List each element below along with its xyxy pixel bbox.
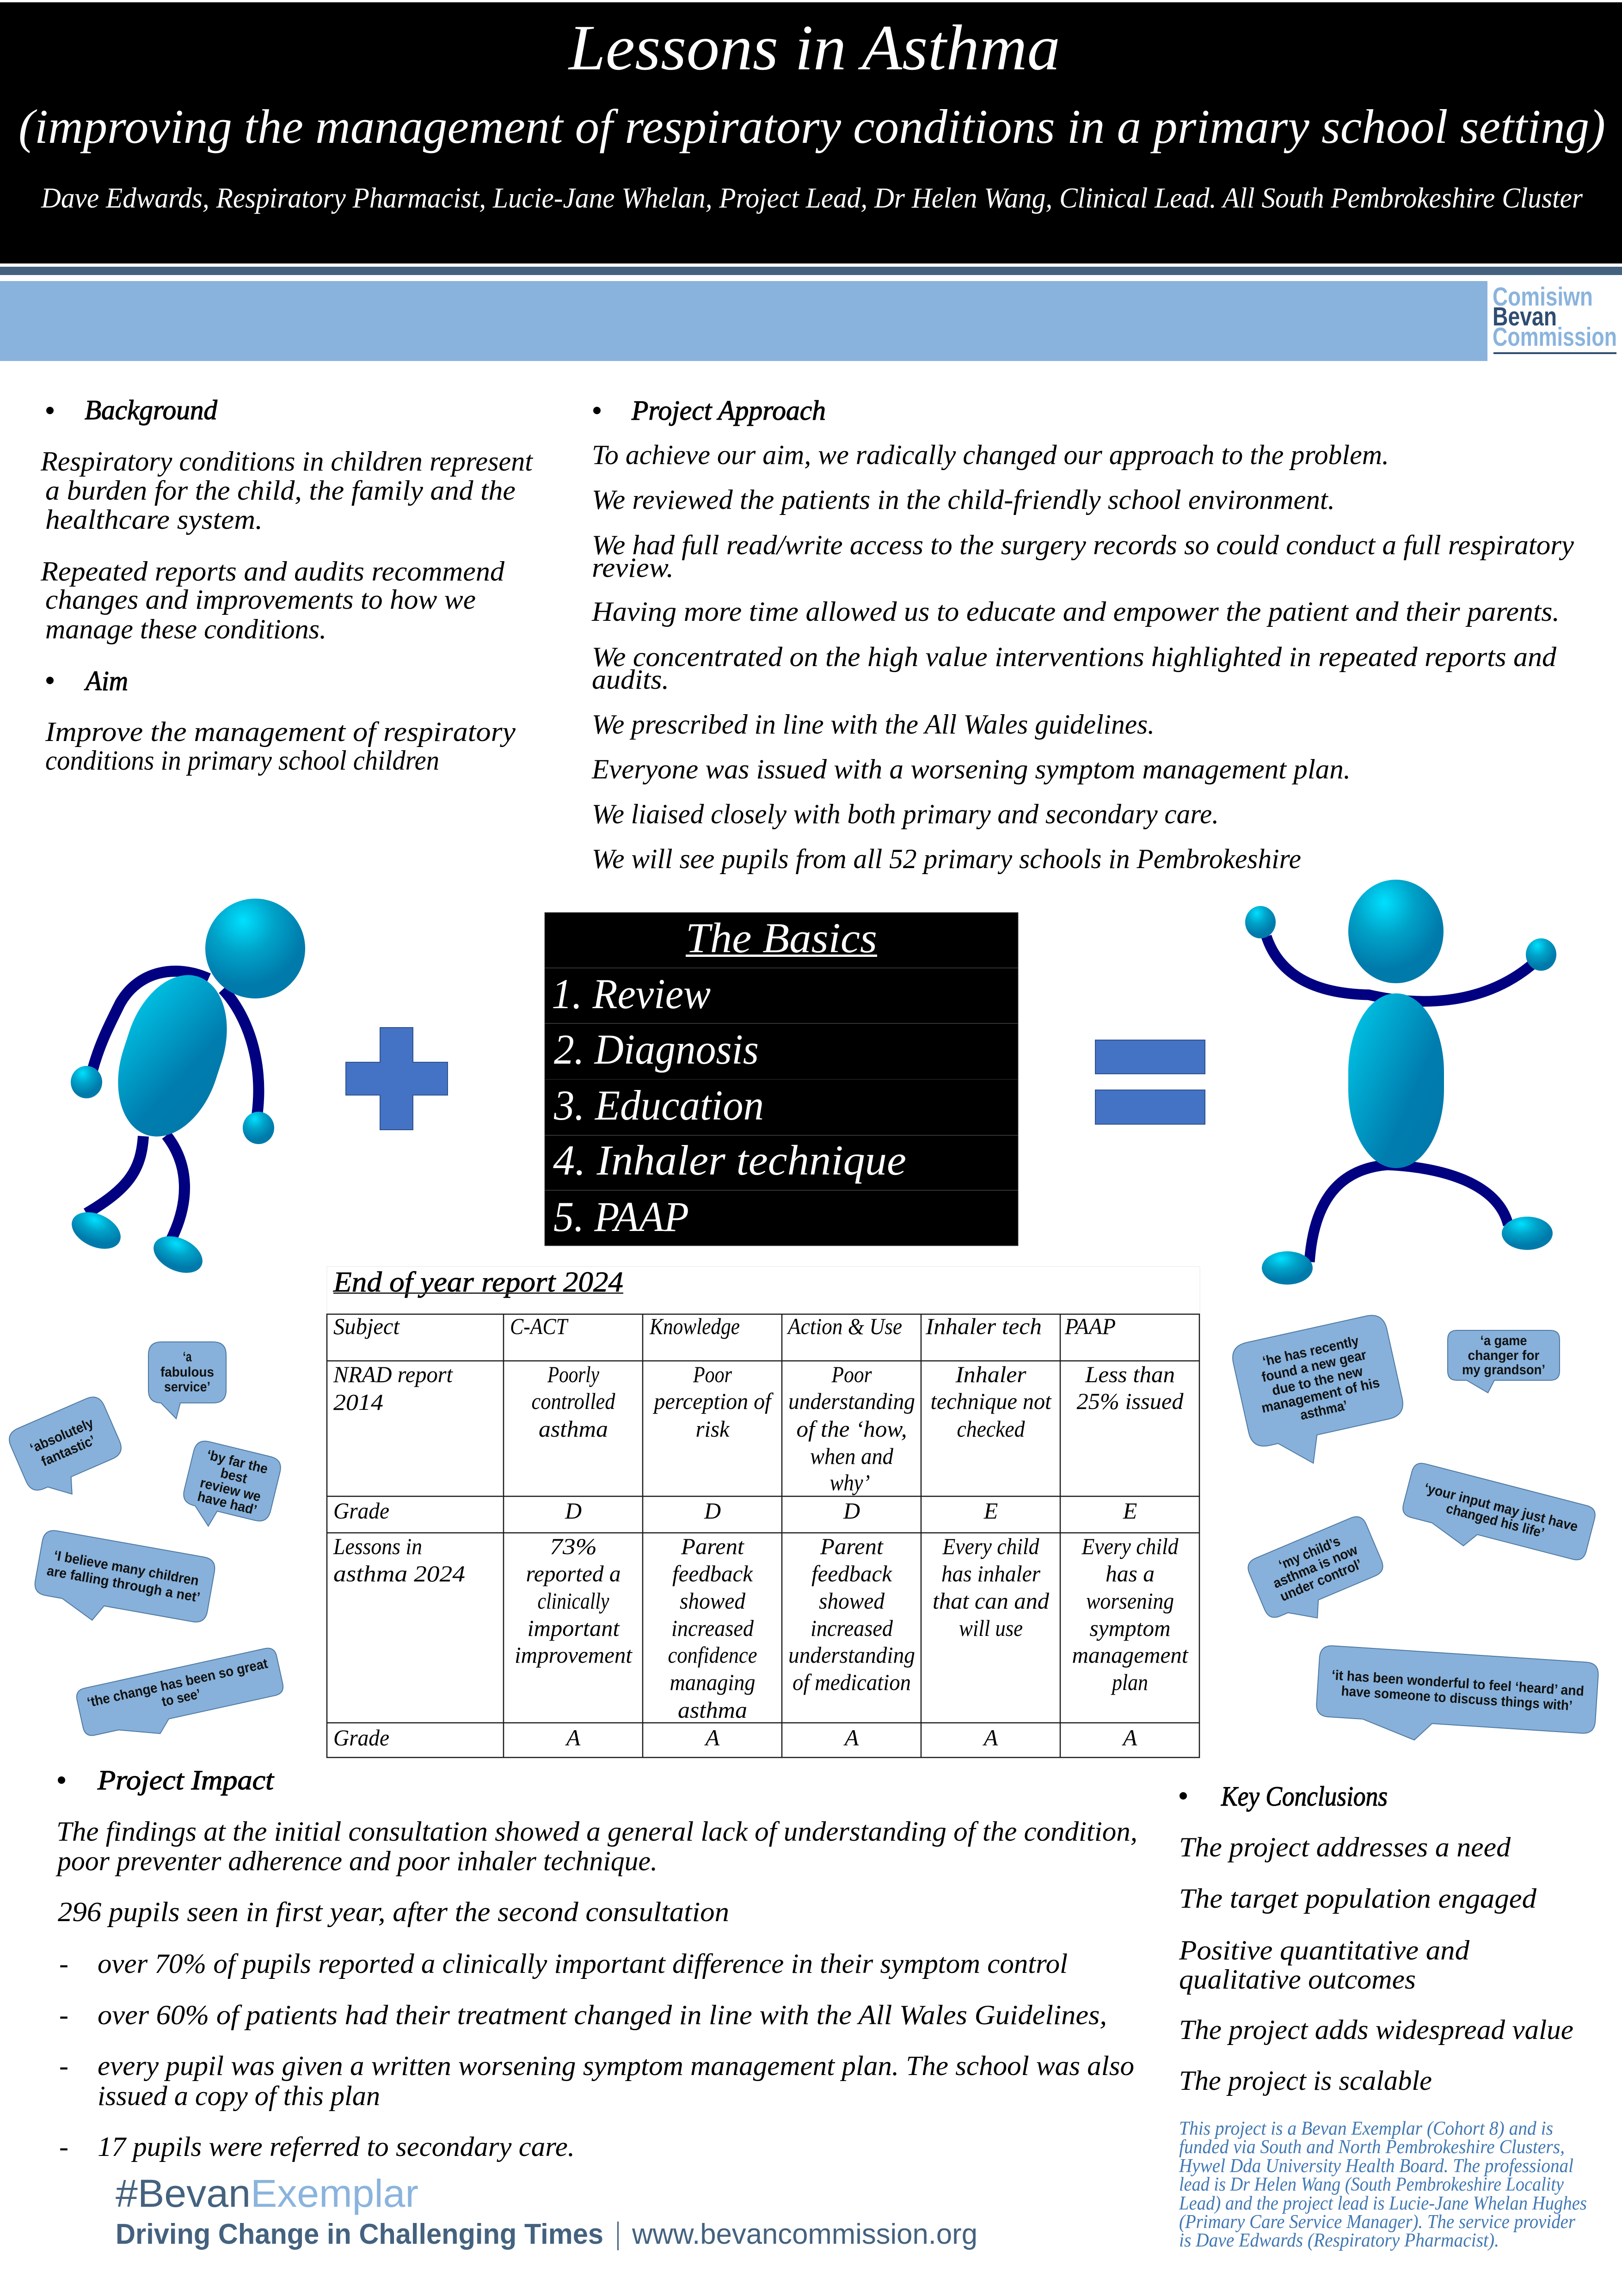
table row: NRAD report 2014: when and [810,1443,894,1469]
list: basics items: 1. Review [552,970,711,1017]
text: background: Repeated reports and audits recommend [40,556,505,587]
table row: NRAD report 2014 [333,1361,1184,1495]
callout: by far the best review [177,1439,283,1540]
footer: hashtag and tagline: Exemplar [251,2172,418,2215]
table row: lessons in asthma 2024: showed [819,1588,885,1614]
text: project impact: The findings at the initial consultation showed a general lack of understanding of the condition, [56,1816,1137,1847]
table row: lessons in asthma 2024: Parent [681,1533,744,1559]
icon: plus sign [346,1028,448,1130]
table header row [333,1313,1116,1339]
table row: lessons in asthma 2024: symptom [1089,1615,1171,1641]
panel: background and aim [40,395,533,776]
table row: grade 2024: A [1122,1725,1137,1751]
text: project approach: We will see pupils from all 52 primary schools in Pembrokeshire [592,844,1301,874]
list: basics items [552,970,906,1240]
table row: lessons in asthma 2024: managing [670,1669,756,1695]
table row: grade 2014: D [565,1498,582,1524]
callout: by far the best review: best [219,1465,249,1487]
table row: NRAD report 2014: Poor [693,1361,732,1387]
table row: NRAD report 2014: risk [695,1416,730,1442]
callout: by far the best review: review we [198,1475,262,1505]
list: basics items: 3. Education [553,1082,764,1129]
text: aim: Improve the management of respiratory [45,716,516,747]
table header row: Inhaler tech [925,1313,1042,1339]
panel: key conclusions [1179,1781,1573,2096]
callout: falling through a net: ‘I believe many children [53,1548,200,1589]
table row: lessons in asthma 2024: feedback [672,1561,753,1586]
callout: feel heard: have someone to discuss things with’ [1341,1684,1573,1714]
callout: new gear: asthma’ [1299,1398,1349,1423]
table row: lessons in asthma 2024: increased [811,1615,893,1641]
icon: equals sign [1095,1040,1205,1124]
callout: under control: asthma is now [1271,1542,1360,1592]
callout: a fabulous service: service’ [164,1379,210,1395]
table row: NRAD report 2014: Poorly [547,1361,600,1387]
table row: grade 2024: Grade [333,1725,389,1751]
table row: lessons in asthma 2024: will use [959,1615,1023,1641]
table row: grade 2024 [333,1725,1137,1751]
callout: falling through a net: are falling through a net’ [46,1563,201,1605]
text: exemplar note: Lead) and the project lead is Lucie-Jane Whelan Hughes [1179,2193,1587,2214]
callout: the change: ‘the change has been so great [86,1656,269,1710]
callout: the change: to see’ [160,1686,202,1709]
logo: Bevan Commission: Comisiwn [1493,282,1593,312]
heading: project approach: Project Approach [631,395,826,426]
text: background: healthcare system. [45,504,263,535]
panel: the basics [545,912,1018,1246]
table row: NRAD report 2014: understanding [788,1388,915,1414]
icon: slumped stick figure [66,899,305,1280]
callout: game changer: my grandson’ [1462,1362,1545,1378]
table row: lessons in asthma 2024: reported a [526,1561,621,1586]
table row: lessons in asthma 2024: Lessons in [333,1533,422,1559]
table row: grade 2014: D [843,1498,860,1524]
callout: absolutely fantastic: fantastic’ [39,1433,98,1469]
table row: lessons in asthma 2024: understanding [788,1642,915,1668]
table row: NRAD report 2014: of the ‘how, [796,1416,907,1442]
table row: NRAD report 2014: 2014 [333,1389,383,1415]
table header row: C-ACT [510,1313,569,1339]
text: project impact: issued a copy of this plan [98,2081,380,2111]
text: project approach [591,440,1574,874]
text: background: a burden for the child, the family and the [45,475,516,506]
text: exemplar note [1179,2118,1587,2251]
table row: lessons in asthma 2024: that can and [933,1588,1050,1614]
table row: lessons in asthma 2024: asthma [678,1697,747,1723]
callout: changed his life [1397,1461,1597,1576]
table row: lessons in asthma 2024: Every child [1081,1533,1179,1559]
callout: under control: ‘my child’s [1277,1533,1343,1573]
text: project approach: Having more time allowed us to educate and empower the patient and their parents. [591,596,1560,627]
table row: lessons in asthma 2024 [333,1533,1189,1723]
table row: lessons in asthma 2024: plan [1111,1669,1148,1695]
callout: new gear [1229,1312,1412,1476]
table row: lessons in asthma 2024: has inhaler [941,1561,1040,1586]
footer: hashtag and tagline: Driving Change in Challenging Times [116,2218,603,2250]
table row: grade 2014: Grade [333,1498,389,1524]
text: key conclusions: Positive quantitative and [1179,1935,1470,1965]
list: basics items: 5. PAAP [553,1193,689,1240]
text: project impact: 17 pupils were referred to secondary care. [98,2131,575,2162]
table row: NRAD report 2014: technique not [930,1388,1052,1414]
list: basics items: 2. Diagnosis [554,1026,759,1073]
table row: grade 2014: E [983,1498,998,1524]
text: project approach: We had full read/write access to the surgery records so could conduct a full respiratory [592,530,1574,560]
text: key conclusions: The target population engaged [1179,1883,1537,1914]
callout: a fabulous service: fabulous [160,1365,214,1380]
header banner [0,2,1622,263]
text: project impact: over 60% of patients had their treatment changed in line with the All Wales Guidelines, [98,2000,1107,2030]
table row: lessons in asthma 2024: of medication [793,1669,911,1695]
heading: aim: Aim [84,666,128,696]
table row: lessons in asthma 2024: clinically [537,1588,609,1614]
table row: NRAD report 2014: Inhaler [955,1361,1026,1387]
text: exemplar note: (Primary Care Service Manager). The service provider [1179,2211,1576,2233]
panel: project impact [55,1765,1137,2162]
text: background [40,446,533,644]
table row: grade 2024: A [704,1725,720,1751]
text: exemplar note: funded via South and North Pembrokeshire Clusters, [1179,2137,1565,2158]
text: exemplar note: is Dave Edwards (Respiratory Pharmacist). [1179,2230,1499,2251]
table row: lessons in asthma 2024: improvement [515,1642,633,1668]
subtitle: (improving the management of respiratory conditions in a primary school setting) [18,99,1605,153]
callout: absolutely fantastic: ‘absolutely [28,1415,96,1456]
text: project approach: We liaised closely with both primary and secondary care. [592,799,1219,829]
table row: lessons in asthma 2024: asthma 2024 [333,1561,465,1586]
callout: new gear: due to the new [1271,1364,1364,1398]
authors: Dave Edwards, Respiratory Pharmacist, Lucie-Jane Whelan, Project Lead, Dr Helen Wang, Clinical Lead. All South Pembrokeshire Cluster [41,183,1583,214]
light blue banner [0,281,1487,361]
text: project impact: - [59,2131,68,2162]
callout: by far the best review: have had’ [196,1489,258,1518]
logo: Bevan Commission: Bevan [1493,302,1557,331]
text: project approach: To achieve our aim, we radically changed our approach to the problem. [592,440,1389,470]
table row: NRAD report 2014: why’ [829,1469,870,1495]
list: basics items: 4. Inhaler technique [553,1137,906,1184]
heading: key conclusions: Key Conclusions [1221,1781,1388,1812]
panel: end of year report [327,1267,1200,1757]
table header row: Subject [333,1313,400,1339]
title: Lessons in Asthma [568,12,1060,84]
table row: NRAD report 2014: Poor [831,1361,872,1387]
table row: NRAD report 2014: controlled [532,1388,615,1414]
callout: game changer [1448,1330,1560,1393]
table row: lessons in asthma 2024: feedback [811,1561,892,1586]
blue band [0,267,1622,275]
table header row: Action & Use [786,1313,902,1339]
text: aim [45,716,516,776]
text: key conclusions [1179,1832,1573,2096]
callout: under control: under control’ [1278,1556,1364,1604]
text: project impact: every pupil was given a written worsening symptom management plan. The school was also [98,2051,1134,2081]
callout: game changer: ‘a game [1481,1333,1527,1348]
logo: Bevan Commission [1493,282,1617,354]
text: key conclusions: The project addresses a need [1179,1832,1511,1862]
text: project impact: over 70% of pupils reported a clinically important difference in their symptom control [98,1948,1068,1979]
callout: absolutely fantastic [6,1393,131,1509]
table row: lessons in asthma 2024: management [1072,1642,1189,1668]
callout: a fabulous service: ‘a [183,1349,192,1365]
text: project impact: - [59,1948,68,1979]
callout: falling through a net [30,1529,217,1640]
callout: new gear: found a new gear [1260,1347,1368,1385]
table row: lessons in asthma 2024: increased [671,1615,754,1641]
text: key conclusions: The project adds widespread value [1179,2014,1573,2045]
text: project approach: Everyone was issued with a worsening symptom management plan. [591,754,1351,784]
table row: grade 2014: D [704,1498,721,1524]
table row: lessons in asthma 2024: 73% [550,1533,597,1559]
table row: lessons in asthma 2024: Every child [942,1533,1039,1559]
panel: project approach [591,395,1574,874]
callout: changed his life: changed his life’ [1444,1501,1546,1541]
heading: the basics: The Basics [686,914,877,961]
table row: lessons in asthma 2024: has a [1106,1561,1155,1586]
callout: feel heard: ‘it has been wonderful to feel ‘heard’ and [1331,1667,1585,1699]
text: project approach: We concentrated on the high value interventions highlighted in repeated reports and [592,642,1557,672]
table row: grade 2024: A [843,1725,859,1751]
table row: NRAD report 2014: perception of [653,1388,774,1414]
table row: lessons in asthma 2024: important [527,1615,620,1641]
table row: lessons in asthma 2024: confidence [668,1642,757,1668]
callout: new gear: management of his [1260,1375,1381,1416]
table row: lessons in asthma 2024: Parent [820,1533,884,1559]
text: project impact: 296 pupils seen in first year, after the second consultation [58,1897,729,1927]
table row: NRAD report 2014: NRAD report [333,1361,453,1387]
text: project impact [55,1816,1137,2162]
table row: grade 2024: A [565,1725,581,1751]
callout: changed his life: ‘your input may just have [1423,1481,1579,1535]
callout: under control [1245,1513,1392,1635]
text: key conclusions: The project is scalable [1179,2065,1432,2096]
table grid [327,1314,1199,1757]
text: project impact: - [59,2000,68,2030]
table row: grade 2024: A [983,1725,998,1751]
table row: NRAD report 2014: 25% issued [1076,1388,1184,1414]
callout: a fabulous service [148,1342,226,1419]
text: exemplar note: This project is a Bevan Exemplar (Cohort 8) and is [1179,2118,1553,2139]
table row: NRAD report 2014: checked [957,1416,1025,1442]
text: project approach: We reviewed the patients in the child-friendly school environment. [592,484,1335,515]
callout: feel heard [1315,1645,1599,1751]
callout: by far the best review: ‘by far the [205,1447,270,1477]
table row: NRAD report 2014: Less than [1085,1361,1175,1387]
table row: NRAD report 2014: asthma [539,1416,608,1442]
text: project impact: poor preventer adherence and poor inhaler technique. [55,1846,657,1876]
table row: grade 2014 [333,1498,1137,1524]
icon: happy stick figure [1245,880,1556,1285]
heading: project impact: Project Impact [97,1765,274,1795]
heading: background: Background [85,395,218,425]
heading: end of year report: End of year report 2024 [333,1267,623,1298]
text: key conclusions: qualitative outcomes [1179,1964,1416,1995]
text: project approach: audits. [592,664,669,695]
table header row: PAAP [1064,1313,1116,1339]
text: background: changes and improvements to how we [45,584,476,615]
footer: hashtag and tagline [116,2172,977,2250]
text: aim: conditions in primary school children [45,745,439,776]
callout: game changer: changer for [1468,1348,1540,1363]
table row: grade 2014: E [1123,1498,1137,1524]
footer: hashtag and tagline: www.bevancommission.org [632,2218,977,2250]
text: background: manage these conditions. [45,614,326,644]
table header row: Knowledge [649,1313,740,1339]
callout: the change [75,1647,288,1750]
text: project impact: - [59,2051,68,2081]
table row: lessons in asthma 2024: worsening [1086,1588,1174,1614]
text: project approach: review. [592,552,674,583]
footer: hashtag and tagline: #Bevan [116,2172,251,2215]
text: background: Respiratory conditions in children represent [40,446,533,477]
table row: lessons in asthma 2024: showed [680,1588,746,1614]
callout: new gear: ‘he has recently [1261,1333,1360,1369]
text: project approach: We prescribed in line with the All Wales guidelines. [592,709,1155,740]
text: exemplar note: lead is Dr Helen Wang (South Pembrokeshire Locality [1179,2174,1564,2195]
text: exemplar note: Hywel Dda University Health Board. The professional [1179,2155,1573,2177]
